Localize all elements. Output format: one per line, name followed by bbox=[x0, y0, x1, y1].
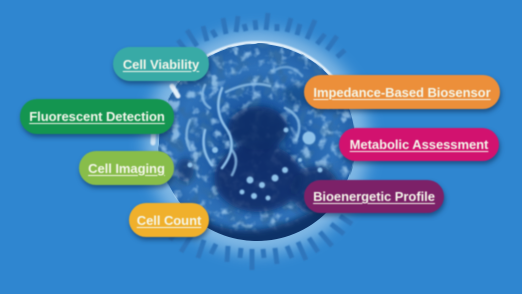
label: Impedance-Based Biosensor: Impedance-Based Biosensor bbox=[313, 84, 491, 100]
dark lower rim bbox=[206, 210, 326, 241]
label: Cell Imaging: Cell Imaging bbox=[88, 160, 165, 176]
label: Bioenergetic Profile bbox=[304, 180, 444, 213]
white highlights on left membrane bbox=[153, 86, 178, 143]
label: Cell Viability bbox=[113, 47, 209, 81]
label: Metabolic Assessment bbox=[339, 128, 499, 161]
label: Cell Viability: Cell Viability bbox=[123, 56, 199, 72]
dark nucleus bbox=[176, 83, 339, 214]
label: Fluorescent Detection: Fluorescent Detection bbox=[29, 109, 165, 124]
white membrane bbox=[178, 43, 345, 96]
cell body bbox=[159, 44, 355, 240]
label: Cell Count: Cell Count bbox=[137, 212, 201, 228]
label: Metabolic Assessment: Metabolic Assessment bbox=[350, 137, 488, 152]
label: Fluorescent Detection bbox=[20, 99, 174, 134]
glow bbox=[145, 30, 369, 254]
label: Cell Imaging bbox=[79, 151, 174, 185]
label: Bioenergetic Profile: Bioenergetic Profile bbox=[313, 189, 435, 204]
light organelles bbox=[186, 67, 302, 175]
label: Cell Count bbox=[129, 203, 209, 237]
spikes bbox=[170, 13, 352, 270]
mottled texture bbox=[158, 43, 355, 241]
label: Impedance-Based Biosensor bbox=[304, 75, 500, 109]
central cell illustration bbox=[136, 13, 378, 270]
